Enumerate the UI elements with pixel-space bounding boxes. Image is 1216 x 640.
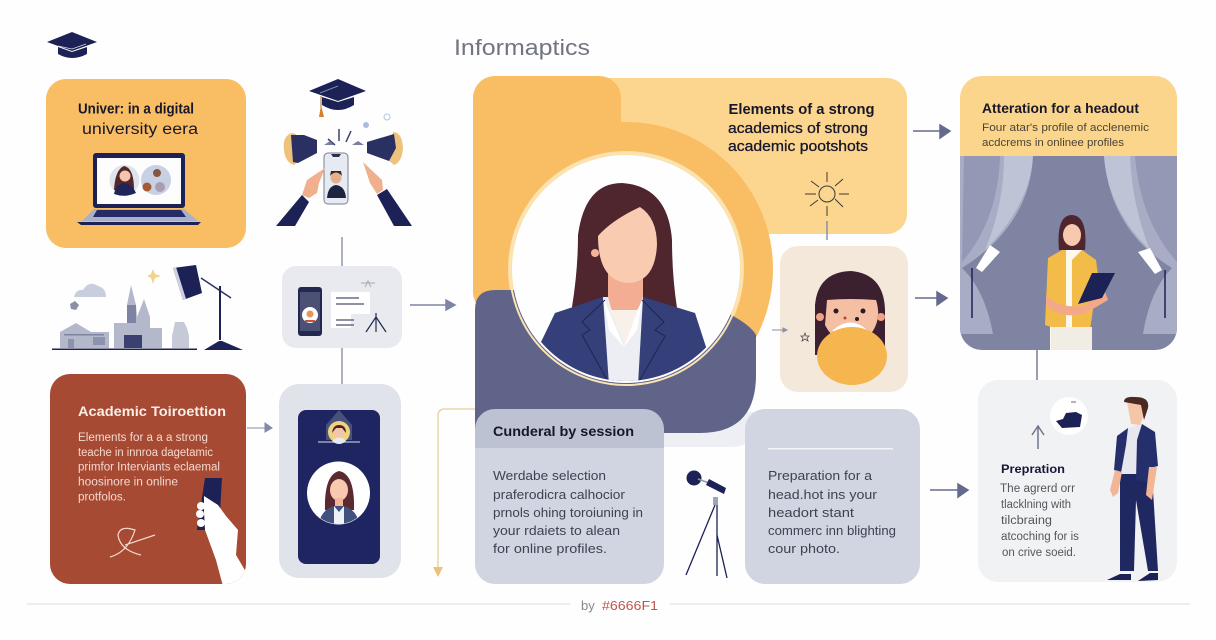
shirt — [603, 297, 643, 385]
heading: strong academics: Elements of a strong — [728, 102, 874, 118]
text block: preparation body: on crive soeid. — [1002, 547, 1076, 559]
title: Informaptics — [454, 35, 590, 60]
arrow: elements to headout — [913, 125, 950, 138]
connector: sun to child — [826, 221, 828, 240]
footer — [27, 598, 1190, 613]
illustration: campus skyline with studio lamp — [52, 265, 243, 350]
icon: smartphone — [324, 153, 348, 204]
heading: strong academics — [728, 102, 874, 155]
arrow: child to headout — [915, 292, 947, 305]
icon: right hand and sleeve — [363, 162, 412, 226]
illustration: woman with tablet — [1045, 215, 1115, 350]
logo: graduation cap — [47, 32, 97, 58]
face and hair — [1127, 402, 1144, 425]
text block: academic body: teache in innroa dagetamic — [78, 447, 213, 459]
panel: wardrobe selection — [475, 409, 664, 584]
decorative white frame around child card — [760, 234, 907, 400]
text block: wardrobe body: praferodicra calhocior — [493, 487, 626, 502]
panel: slate base behind portrait — [475, 290, 768, 447]
text block: preparation body: tlacklning with — [1001, 499, 1071, 511]
text block: wardrobe body — [493, 468, 643, 556]
icon: star marker — [801, 333, 809, 341]
panel: university in a digital era — [46, 79, 246, 248]
text block: preparation body: tilcbraing — [1001, 515, 1052, 527]
icon: campus buildings — [60, 285, 189, 348]
main portrait — [510, 153, 742, 390]
text block: academic body: Elements for a a a strong — [78, 432, 208, 444]
ring behind portrait — [479, 122, 773, 416]
illustration: phone photo with hands and lights — [276, 79, 412, 226]
icon: sun — [805, 172, 849, 216]
panel: attention for a headshot — [960, 76, 1177, 350]
icon: mini tripod — [366, 313, 386, 332]
face — [598, 207, 657, 283]
text block: academic body — [78, 432, 220, 504]
jacket — [541, 297, 706, 390]
text block: preparation body — [1000, 483, 1079, 559]
connector: headout to preparation — [1036, 350, 1038, 380]
illustration: curtains — [960, 156, 1177, 334]
connector: top vertical line — [341, 237, 343, 266]
heading: digital university: university eera — [82, 121, 198, 138]
neck — [608, 274, 643, 310]
panel: child portrait — [780, 246, 908, 392]
text block: preparation body: atcoching for is — [1001, 531, 1079, 543]
text block: academic body: protfolos. — [78, 492, 126, 504]
arrow: portrait to child — [772, 328, 787, 332]
text block: academic body: primfor Interviants eclaemal — [78, 462, 220, 474]
icon: large portrait — [307, 462, 370, 528]
icon: camera on tripod — [686, 470, 727, 578]
footer: #6666F1 — [602, 598, 658, 613]
text block: headshot body — [768, 468, 896, 556]
connector: middle vertical line — [341, 348, 343, 384]
arrow: to phone card — [247, 423, 272, 432]
panel: preparation for a headshot — [745, 409, 920, 584]
panel: preparation with person — [978, 380, 1177, 582]
illustration: standing man — [1107, 397, 1158, 581]
heading: headout: Atteration for a headout — [982, 101, 1140, 116]
arrow: yellow return line — [433, 409, 475, 577]
footer: by — [581, 598, 595, 613]
icon: star — [147, 269, 161, 284]
icon: signature — [110, 528, 155, 557]
text block: headshot body: headort stant — [768, 505, 854, 520]
panel: phone with portrait — [279, 384, 401, 578]
shoes — [1107, 573, 1158, 581]
text block: preparation body: The agrerd orr — [1000, 483, 1075, 495]
text block: wardrobe body: your rdaiets to alean — [493, 523, 620, 538]
heading: preparation: Prepration — [1001, 462, 1065, 476]
text block: headshot body: head.hot ins your — [768, 487, 878, 502]
arrow: up — [1032, 426, 1044, 449]
heading: academic: Academic Toiroettion — [78, 403, 226, 419]
collar — [603, 297, 643, 347]
heading: digital university: Univer: in a digital — [78, 100, 194, 118]
panel: profile card with phone — [282, 266, 402, 348]
text block: headshot body: Preparation for a — [768, 468, 873, 483]
icon: left studio light — [284, 133, 317, 165]
heading: digital university — [78, 100, 198, 138]
text block: wardrobe body: prnols ohing toroiuning in — [493, 505, 643, 520]
text block: headshot body: commerc inn blighting — [768, 523, 896, 538]
arrow: to portrait — [410, 300, 455, 310]
hair — [572, 183, 677, 320]
arrow: preparation card — [930, 484, 968, 497]
text block: wardrobe body: for online profiles. — [493, 541, 607, 556]
text block: headout body — [982, 122, 1150, 149]
icon: laptop with video call — [77, 153, 201, 225]
text block: headshot body: cour photo. — [768, 541, 840, 556]
text block: academic body: hoosinore in online — [78, 476, 178, 488]
text block: wardrobe body: Werdabe selection — [493, 468, 606, 483]
heading: session: Cunderal by session — [493, 423, 634, 439]
icon: small phone — [298, 287, 322, 336]
heading: strong academics: academics of strong — [728, 121, 868, 137]
icon: camera badge — [1050, 397, 1088, 435]
legs — [1120, 474, 1158, 571]
icon: text note — [331, 292, 370, 328]
icon: left hand and sleeve — [276, 168, 325, 226]
heading: strong academics: academic pootshots — [728, 139, 868, 155]
panel: elements of a strong headshot — [473, 76, 907, 314]
panel: academic introduction — [50, 374, 246, 590]
icon: cloud — [74, 284, 106, 297]
text block: headout body: Four atar's profile of acclenemic — [982, 122, 1150, 134]
arms — [1110, 467, 1157, 500]
icon: hand holding phone — [196, 478, 246, 590]
icon: small portrait — [318, 410, 360, 444]
icon: right studio light — [367, 132, 403, 165]
jacket — [1114, 424, 1158, 482]
text block: headout body: acdcrems in onlinee profiles — [982, 137, 1125, 149]
icon: graduation cap with tassel — [309, 79, 366, 117]
t-shirt — [1122, 423, 1142, 474]
icon: studio lamp on stand — [173, 265, 243, 350]
